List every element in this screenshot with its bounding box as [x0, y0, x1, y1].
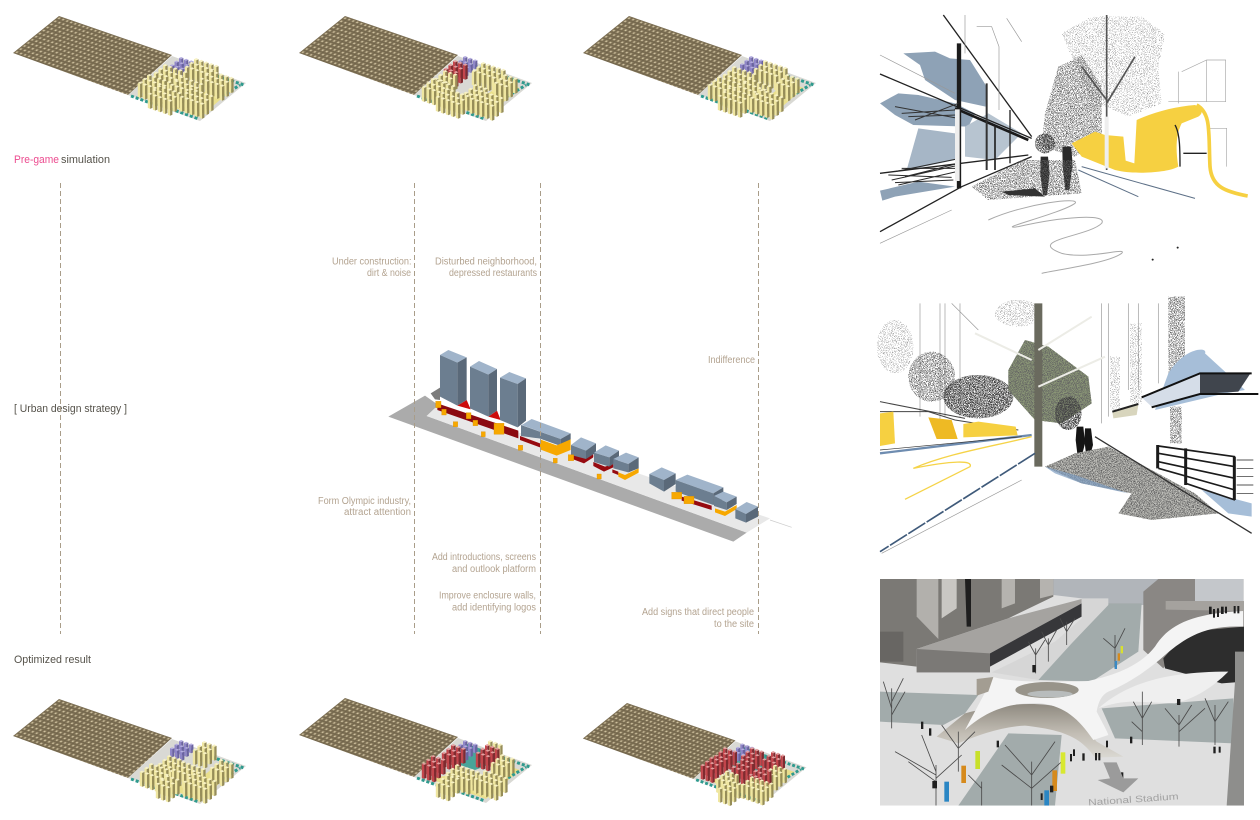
- sidewalk: [992, 598, 1108, 680]
- note: enclosure walls: Improve enclosure walls,: [439, 590, 536, 602]
- note: enclosure walls: add identifying logos: [452, 602, 536, 614]
- canopy structure: [937, 611, 1243, 758]
- label: national stadium: National Stadium: [1088, 791, 1179, 808]
- right buildings: [1143, 579, 1244, 806]
- banners: [944, 646, 1123, 806]
- ground scribble: [988, 201, 1122, 273]
- map: pre-game scenario 1: [13, 16, 246, 121]
- heading: pre-game simulation: simulation: [61, 154, 110, 166]
- ink specks: [1152, 247, 1179, 261]
- blue shelter canopy: [1112, 350, 1258, 418]
- map: optimized scenario 2: [299, 698, 532, 803]
- note: indifference: Indifference: [708, 355, 755, 366]
- note: signs: [642, 607, 754, 630]
- map: optimized scenario 3: [583, 703, 807, 806]
- tall blue towers: [440, 350, 526, 427]
- note: introductions: Add introductions, screens: [432, 552, 536, 563]
- vertical dashed guide lines: [60, 183, 758, 634]
- building outlines: [1168, 60, 1227, 167]
- left towers: [880, 579, 1053, 667]
- low blue boxes: [521, 419, 758, 523]
- note: enclosure walls: [439, 590, 536, 614]
- note: olympic industry: Form Olympic industry,: [318, 496, 411, 507]
- trees: [1035, 15, 1165, 170]
- map: pre-game scenario 2: [299, 16, 532, 121]
- note: introductions: and outlook platform: [452, 564, 536, 575]
- ground hatching: [972, 160, 1195, 200]
- pedestrians: [1076, 427, 1093, 457]
- background vertical lines: [920, 303, 1158, 423]
- diagram ground: [388, 388, 792, 542]
- right hatched facades: [1110, 297, 1185, 443]
- fence line and yellow hoarding: [880, 402, 1032, 453]
- white column: [955, 109, 960, 181]
- ground: [880, 579, 1244, 806]
- yellow signs: [436, 401, 694, 504]
- pedestrians: [1040, 147, 1073, 195]
- rendering: canopy bridge and national stadium: [880, 579, 1244, 808]
- people: [921, 606, 1239, 800]
- left dark trees: [877, 320, 1013, 418]
- roads: [880, 603, 1233, 806]
- heading: urban design strategy: [ Urban design strategy ]: [14, 403, 127, 415]
- street diagram: [388, 350, 792, 542]
- yellow road line: [905, 437, 1032, 499]
- note: disturbed neighborhood: depressed restaurants: [449, 268, 537, 279]
- note: under construction: dirt & noise: [367, 268, 411, 279]
- note: olympic industry: [318, 496, 411, 518]
- sketch: street with yellow canopy: [880, 15, 1248, 273]
- arrow: toward stadium: [1098, 762, 1138, 792]
- heading: pre-game simulation: [14, 154, 110, 166]
- red podium: [437, 400, 712, 510]
- note: introductions: [432, 552, 536, 575]
- note: under construction: [332, 256, 412, 279]
- yellow canopy: [1072, 105, 1248, 196]
- note: under construction: Under construction:: [332, 256, 412, 268]
- main tree: [975, 300, 1105, 467]
- heading: optimized result: Optimized result: [14, 654, 91, 666]
- note: disturbed neighborhood: [435, 256, 537, 279]
- blue wash shadows: [880, 52, 1022, 201]
- sketch: tree-lined sidewalk: [877, 297, 1258, 553]
- facade perspective lines: [880, 15, 1032, 243]
- note: signs: Add signs that direct people: [642, 607, 754, 618]
- note: signs: to the site: [714, 619, 754, 630]
- note: disturbed neighborhood: Disturbed neighborhood,: [435, 256, 537, 268]
- map: optimized scenario 1: [13, 699, 246, 804]
- ground hatching: [880, 447, 1252, 553]
- podium building: [917, 599, 1082, 672]
- sky: [1053, 579, 1243, 605]
- bare trees: [883, 618, 1228, 806]
- heading: pre-game simulation: Pre-game: [14, 154, 59, 166]
- map: pre-game scenario 3: [583, 16, 816, 121]
- note: olympic industry: attract attention: [344, 507, 411, 518]
- railing fence: [1095, 437, 1253, 533]
